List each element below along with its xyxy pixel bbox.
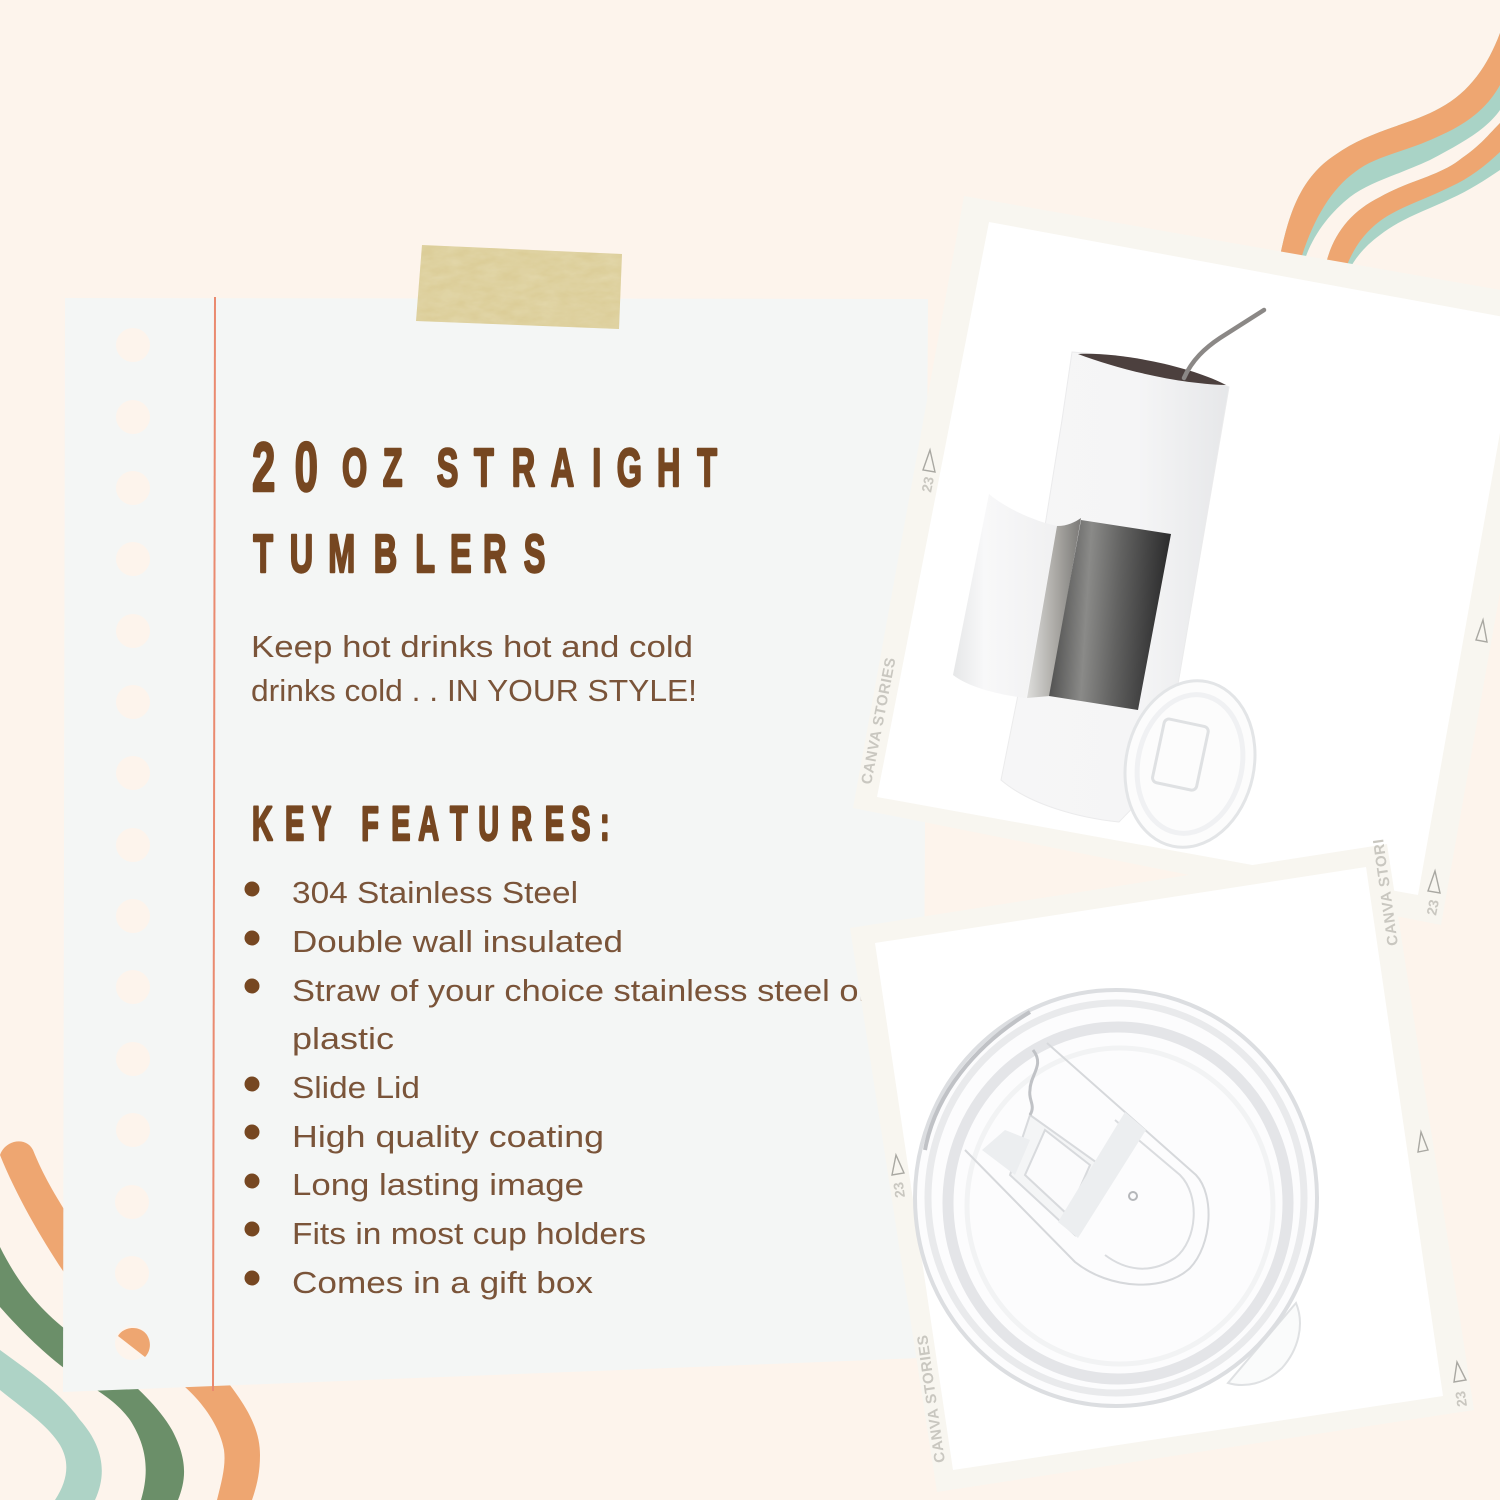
- features list: High quality coating: [292, 1119, 604, 1154]
- frame marks: CANVA STORIES: [914, 1333, 949, 1464]
- title: TUMBLERS: [253, 525, 545, 584]
- features list: Comes in a gift box: [292, 1265, 594, 1300]
- decorative waves: top right: [1279, 33, 1500, 272]
- intro text: Keep hot drinks hot and cold: [251, 629, 693, 664]
- silver edge: [1027, 518, 1081, 698]
- margin line: [213, 297, 215, 1391]
- frame marks: CANVA STORI: [1370, 837, 1402, 947]
- frame marks: 23: [1452, 1390, 1470, 1408]
- features list: plastic: [292, 1021, 394, 1056]
- hole: orange wave showing through: [118, 1328, 150, 1357]
- features list: 304 Stainless Steel: [292, 875, 578, 910]
- features list: [244, 875, 870, 1300]
- wave: orange top: [0, 1141, 72, 1284]
- outer highlight: [925, 1012, 1030, 1150]
- title: OZ: [342, 439, 403, 498]
- title: 20: [252, 429, 318, 507]
- intro text: drinks cold . . IN YOUR STYLE!: [251, 673, 697, 708]
- straw: [1184, 310, 1264, 378]
- steel panel: [1049, 520, 1171, 710]
- slider mechanism: [982, 1050, 1146, 1238]
- slider inner outline: [1105, 1120, 1194, 1269]
- heading: key features: KEYFEATURES:: [252, 798, 610, 851]
- small lid: [1110, 669, 1270, 859]
- frame marks: [858, 450, 1487, 917]
- tumbler body: [1001, 352, 1229, 822]
- frame marks: 23: [1423, 898, 1442, 917]
- wave: teal: [0, 1350, 102, 1500]
- frame marks: CANVA STORIES: [858, 656, 900, 786]
- features list: Long lasting image: [292, 1167, 584, 1202]
- wave: green: [0, 1247, 184, 1500]
- lid rings: [915, 990, 1317, 1406]
- intro text: [251, 629, 697, 708]
- photo frame: tumbler: [853, 196, 1500, 925]
- rim: [1078, 354, 1226, 385]
- title: [252, 429, 717, 584]
- clear slide lid illustration: [915, 990, 1317, 1406]
- slider outer outline: [965, 1043, 1209, 1285]
- tumbler illustration: [953, 310, 1270, 859]
- lid tab: [1228, 1303, 1300, 1385]
- features list: Straw of your choice stainless steel or: [292, 973, 870, 1008]
- panel: notebook paper: [63, 297, 928, 1392]
- punched holes: [115, 328, 150, 1360]
- title: STRAIGHT: [437, 439, 717, 498]
- features list: Fits in most cup holders: [292, 1216, 646, 1251]
- frame marks: [890, 837, 1470, 1464]
- features list: Double wall insulated: [292, 924, 623, 959]
- peeled sheet: [953, 494, 1057, 698]
- frame marks: 23: [918, 475, 937, 494]
- frame marks: 23: [890, 1181, 908, 1199]
- wave: orange bottom: [185, 1380, 260, 1500]
- decorative waves: bottom left: [0, 1141, 260, 1500]
- bullets: [244, 882, 260, 1286]
- washi tape: [416, 245, 622, 329]
- features list: Slide Lid: [292, 1070, 420, 1105]
- photo frame: lid: [850, 837, 1474, 1492]
